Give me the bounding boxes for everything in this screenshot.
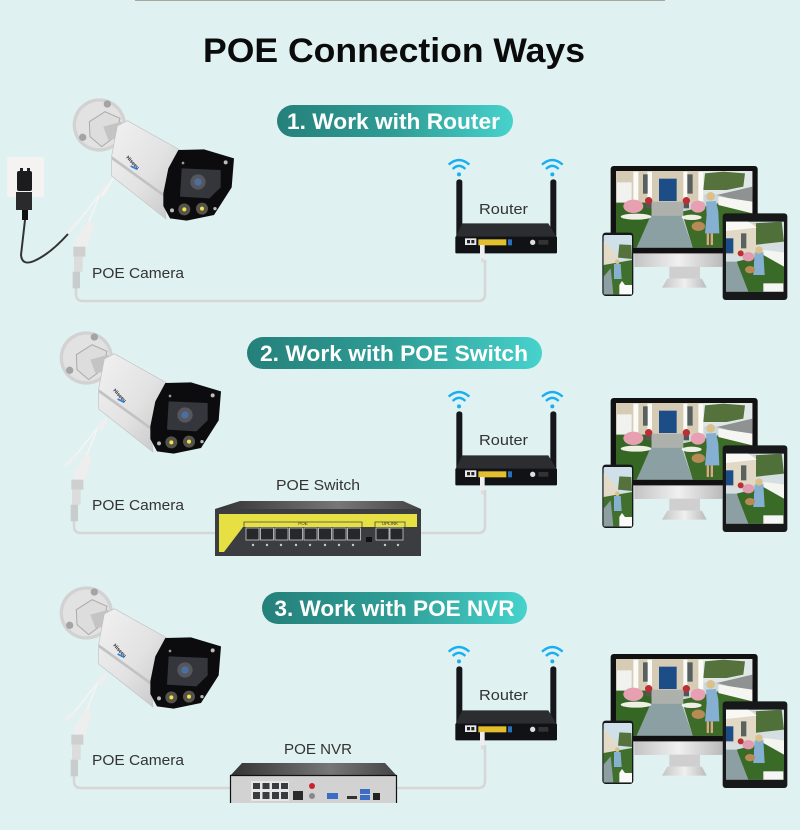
label: POE Switch: POE Switch <box>276 477 360 494</box>
label: Router: Router <box>479 201 528 218</box>
monitor, tablet and phone <box>602 654 787 788</box>
camera 2 <box>60 331 221 454</box>
heading pill 3: 3. Work with POE NVR <box>274 596 515 621</box>
heading pill 2 <box>247 337 542 369</box>
title: POE Connection Ways <box>203 32 585 70</box>
panel: work with POE switch <box>60 331 787 556</box>
camera 3 <box>60 586 221 709</box>
label: POE Camera: POE Camera <box>92 265 185 282</box>
panel: work with POE NVR <box>60 586 787 803</box>
label: POE NVR: POE NVR <box>284 741 352 758</box>
panel: work with router <box>7 98 787 301</box>
heading pill 1: 1. Work with Router <box>287 109 500 134</box>
label: Router: Router <box>479 432 528 449</box>
heading pill 3 <box>262 592 527 624</box>
POE switch <box>215 501 421 556</box>
PoE splitter cable <box>68 175 115 288</box>
cables: camera to NVR to router <box>74 745 485 788</box>
POE switch: UPLINK <box>382 521 398 526</box>
router 2 <box>449 392 563 494</box>
heading pill 1 <box>277 105 513 137</box>
PoE splitter cable <box>66 418 108 521</box>
label: POE Camera: POE Camera <box>92 752 185 769</box>
monitor, tablet and phone <box>602 398 787 532</box>
router 1 <box>449 160 563 262</box>
POE NVR <box>230 763 397 803</box>
heading pill 2: 2. Work with POE Switch <box>260 341 528 366</box>
POE switch: POE <box>298 521 308 526</box>
label: Router: Router <box>479 687 528 704</box>
PoE splitter cable <box>66 673 108 776</box>
cable: camera to router <box>76 260 485 301</box>
router 3 <box>449 647 563 749</box>
label: POE Camera: POE Camera <box>92 497 185 514</box>
monitor, tablet and phone <box>602 166 787 300</box>
power adapter and wall socket <box>7 157 68 263</box>
camera 1 <box>73 98 234 221</box>
cables: camera to switch to router <box>74 490 485 533</box>
